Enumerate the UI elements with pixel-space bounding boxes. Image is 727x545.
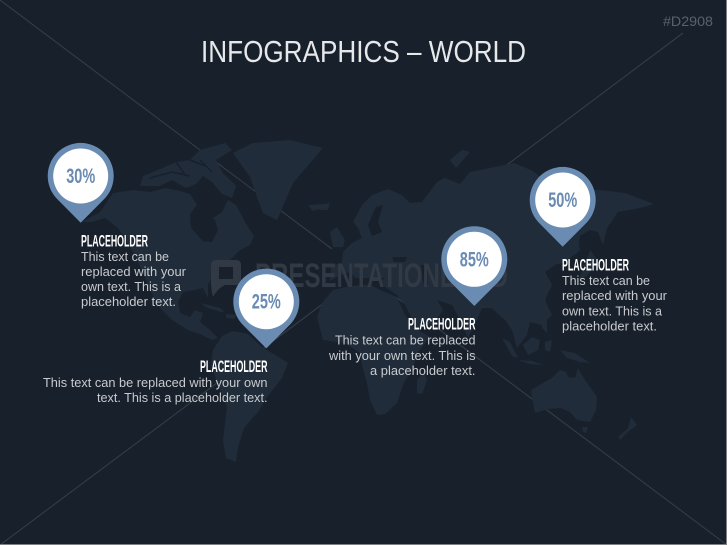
text block: 30%: PLACEHOLDER [81,232,148,250]
text block: 25% [43,358,268,405]
pin: 25% [233,269,299,348]
text block: 50%: own text. This is a [562,304,662,318]
pin: 85%: 85% [460,248,489,271]
text block: 30% [81,232,186,309]
text block: 25%: This text can be replaced with your own [43,376,268,390]
text block: 85%: This text can be replaced [335,334,476,348]
map: Arctic channels [150,160,212,178]
text block: 25%: PLACEHOLDER [200,358,268,376]
watermark: PresentationLoad: PRESENTATIONLOAD [255,257,508,295]
pin: 50%: 50% [548,189,577,212]
text block: 30%: replaced with your [81,265,186,279]
text block: 85%: PLACEHOLDER [408,316,476,334]
pin: 30% [48,143,114,223]
map: islands of Europe and Asia [318,150,596,333]
text block: 30%: This text can be [81,250,169,264]
text block: 50% [562,256,667,334]
map: Eurasia [330,163,654,348]
title: INFOGRAPHICS – WORLD [201,35,526,69]
map: North America [82,188,254,340]
text block: 50%: This text can be [562,274,650,288]
pin: 85% [441,226,507,306]
text block: 50%: PLACEHOLDER [562,256,629,274]
map: Caribbean islands [200,303,236,319]
map: Hudson Bay and inland water [191,214,218,242]
text block: 50%: placeholder text. [562,320,657,334]
text block: 30%: placeholder text. [81,295,176,309]
text block: 85% [328,316,476,378]
text block: 85%: a placeholder text. [370,364,476,378]
text block: 30%: own text. This is a [81,280,181,294]
text block: 50%: replaced with your [562,289,667,303]
map: Africa [317,283,430,415]
pin: 50% [530,167,596,247]
map: Australia [531,368,597,422]
text block: 85%: with your own text. This is [328,349,476,363]
map: Southeast Asia and Oceania [502,337,590,365]
document code: #D2908 [663,13,713,29]
pin: 30%: 30% [66,165,95,188]
watermark logo [211,260,241,297]
watermark: PresentationLoad [211,257,508,297]
pin: 25%: 25% [252,291,281,314]
map: Arctic islands [140,143,236,198]
map: South America [211,331,288,462]
world map [82,140,654,462]
map: Greenland [233,140,323,220]
text block: 25%: text. This is a placeholder text. [97,391,268,405]
